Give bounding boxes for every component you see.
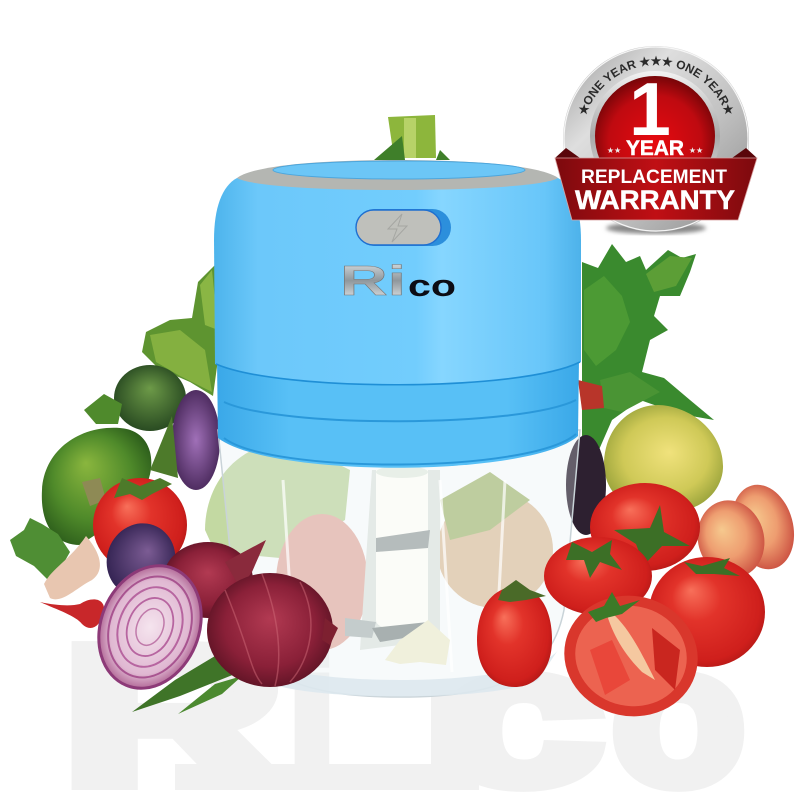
back tomato [590, 483, 700, 571]
Rico logo [340, 257, 456, 304]
small stars left: ★★ [607, 146, 621, 155]
peach through jar [276, 514, 368, 650]
whole red onion [207, 573, 338, 687]
number 1: 1 [629, 67, 671, 151]
apple [604, 405, 723, 510]
eggplant [566, 435, 606, 535]
power button [356, 209, 451, 246]
background pale area [360, 470, 440, 650]
cabbage [205, 440, 350, 558]
celery stalk [374, 115, 450, 160]
blender lower collar [217, 360, 579, 468]
chopped garlic [385, 620, 450, 665]
inner bevel [590, 71, 720, 201]
front tomatoes right [477, 537, 765, 729]
banner [555, 158, 757, 220]
peach right [723, 478, 800, 576]
dark red onion [163, 540, 266, 618]
warranty badge [554, 46, 758, 236]
pale fruit right [437, 492, 553, 608]
silver ring [563, 46, 749, 232]
year label: YEAR [626, 137, 684, 160]
vegetables behind left [10, 265, 222, 628]
herb sprig [10, 518, 70, 580]
front vegetables left [81, 540, 338, 714]
Rico logo: co [408, 268, 456, 303]
cut red onion [81, 550, 219, 704]
small stars right: ★★ [689, 146, 703, 155]
red tomato [93, 478, 187, 572]
tomato pair [544, 537, 652, 615]
large tomato [649, 557, 765, 667]
vegetables behind right [566, 244, 800, 585]
parsley [578, 244, 714, 452]
blue lid top [273, 161, 525, 179]
jar contents [205, 440, 553, 650]
cut tomato [553, 583, 709, 729]
blender body [214, 160, 581, 385]
Rico logo: Ri [340, 257, 406, 304]
chili [40, 599, 104, 628]
replacement text: REPLACEMENT [581, 166, 727, 188]
chopper column [376, 466, 428, 630]
grey lid ring [237, 160, 558, 190]
transparent jar [218, 430, 580, 697]
whole tomato [477, 580, 552, 687]
warranty text: WARRANTY [575, 185, 735, 215]
red disc [595, 76, 715, 196]
garlic [44, 536, 100, 599]
peach left [689, 493, 773, 585]
watermark brand name [62, 606, 745, 800]
plum [96, 514, 186, 606]
ring text: ★ONE YEAR ★★★ ONE YEAR★ [578, 56, 734, 114]
green leaves [132, 650, 242, 714]
green pepper [42, 428, 151, 545]
banner flaps [555, 148, 757, 158]
lettuce leaves [142, 265, 222, 396]
blades [345, 530, 430, 642]
cucumber [114, 365, 186, 431]
purple cabbage [172, 390, 220, 490]
